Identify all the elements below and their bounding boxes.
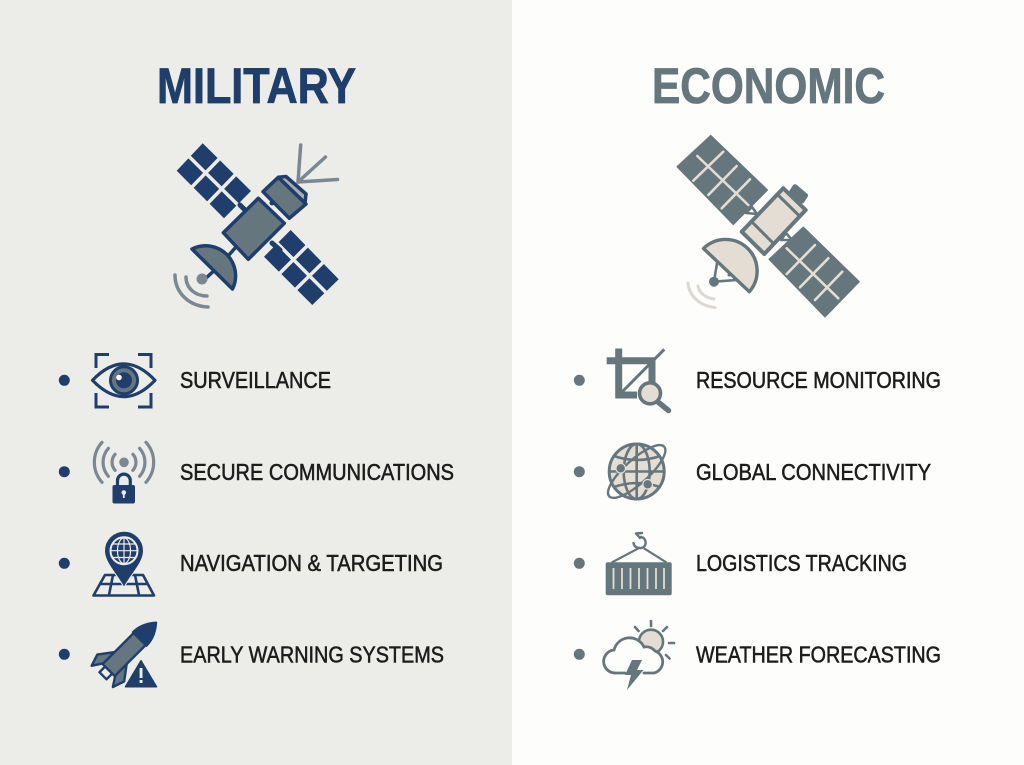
icon: map pin with globe: [94, 531, 154, 596]
icon: storm cloud with sun: [604, 621, 674, 690]
label: surveillance: SURVEILLANCE: [180, 367, 331, 393]
heading: economic: ECONOMIC: [652, 58, 885, 114]
list item: weather forecasting: [574, 621, 941, 690]
icon: signal with lock: [94, 442, 154, 504]
icon: eye scan: [92, 354, 155, 407]
list item: secure communications: [59, 442, 454, 504]
list item: resource monitoring: [574, 348, 941, 410]
heading: military: MILITARY: [157, 58, 356, 114]
icon: crop with magnifier: [607, 348, 668, 410]
label: navigation and targeting: NAVIGATION & TARGETING: [180, 550, 443, 576]
label: secure communications: SECURE COMMUNICATIONS: [180, 459, 454, 485]
list item: global connectivity: [574, 438, 931, 505]
list item: early warning systems: [59, 609, 444, 690]
icon: military satellite: [175, 143, 339, 307]
icon: cargo container: [606, 533, 672, 595]
panel: military: [0, 0, 512, 765]
label: resource monitoring: RESOURCE MONITORING: [696, 367, 941, 393]
icon: economic satellite: [677, 136, 859, 317]
list item: navigation and targeting: [59, 531, 443, 596]
label: weather forecasting: WEATHER FORECASTING: [696, 642, 941, 668]
label: global connectivity: GLOBAL CONNECTIVITY: [696, 459, 931, 485]
list item: surveillance: [59, 354, 331, 407]
list item: logistics tracking: [574, 533, 907, 595]
panel: economic: [512, 0, 1024, 765]
label: early warning systems: EARLY WARNING SYSTEMS: [180, 642, 444, 668]
icon: globe with orbit: [601, 438, 672, 505]
label: logistics tracking: LOGISTICS TRACKING: [696, 550, 907, 576]
icon: missile with warning: [89, 609, 169, 690]
